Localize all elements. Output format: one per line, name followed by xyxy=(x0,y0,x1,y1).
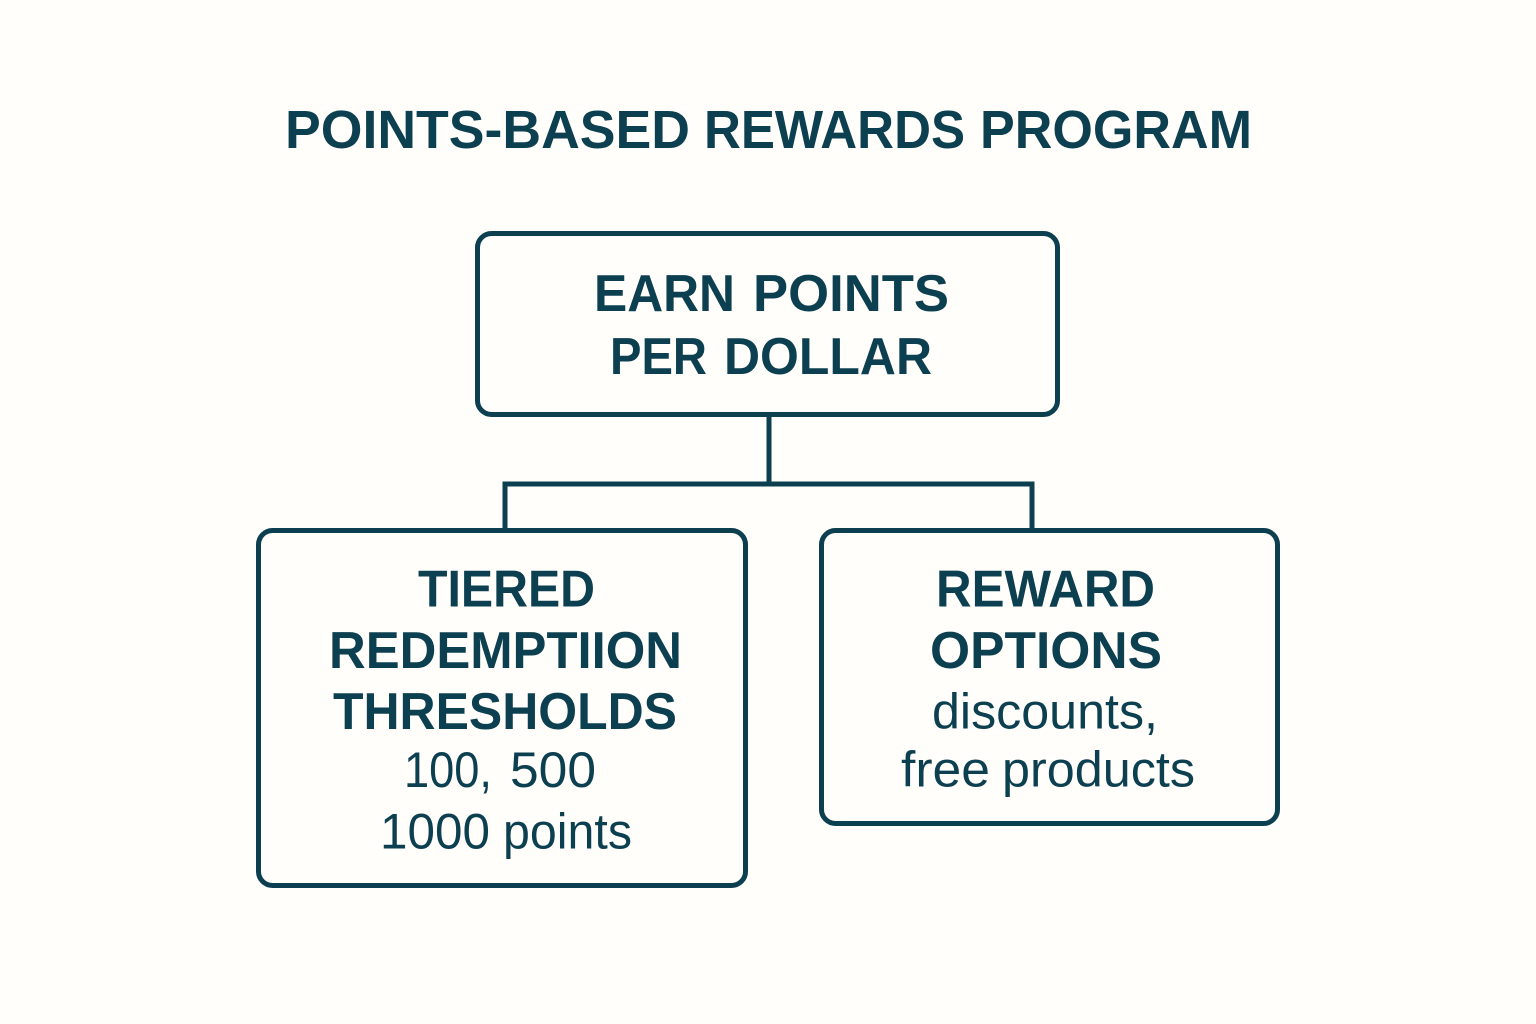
text: point thresholds xyxy=(380,742,632,860)
heading: reward options: REWARD xyxy=(936,560,1155,618)
heading: earn points per dollar: EARN xyxy=(594,265,735,323)
heading: reward options xyxy=(930,560,1162,680)
text: point thresholds: 500 xyxy=(510,742,596,798)
title xyxy=(285,100,1252,160)
heading: earn points per dollar: PER xyxy=(610,328,707,386)
text: discounts, free products: free xyxy=(901,742,990,798)
heading: tiered redemption thresholds xyxy=(329,560,682,741)
panel: tiered redemption thresholds xyxy=(258,530,746,886)
connector lines xyxy=(505,415,1032,530)
title: POINTS-BASED xyxy=(285,100,690,160)
title: REWARDS xyxy=(704,100,965,160)
heading: tiered redemption thresholds: THRESHOLDS xyxy=(333,683,677,741)
text: discounts, free products: discounts, xyxy=(932,684,1158,740)
heading: earn points per dollar xyxy=(594,265,949,386)
heading: tiered redemption thresholds: TIERED xyxy=(418,560,595,618)
text: point thresholds: 1000 xyxy=(380,804,490,860)
text: point thresholds: 100, xyxy=(404,742,492,798)
text: discounts, free products xyxy=(901,684,1195,798)
text: point thresholds: points xyxy=(503,804,632,860)
heading: earn points per dollar: DOLLAR xyxy=(724,328,932,386)
heading: earn points per dollar: POINTS xyxy=(753,265,949,323)
text: discounts, free products: products xyxy=(1002,742,1195,798)
panel: reward options xyxy=(822,530,1278,824)
heading: reward options: OPTIONS xyxy=(930,622,1162,680)
heading: tiered redemption thresholds: REDEMPTIION xyxy=(329,622,682,680)
panel: earn points xyxy=(478,234,1058,414)
title: PROGRAM xyxy=(980,100,1252,160)
